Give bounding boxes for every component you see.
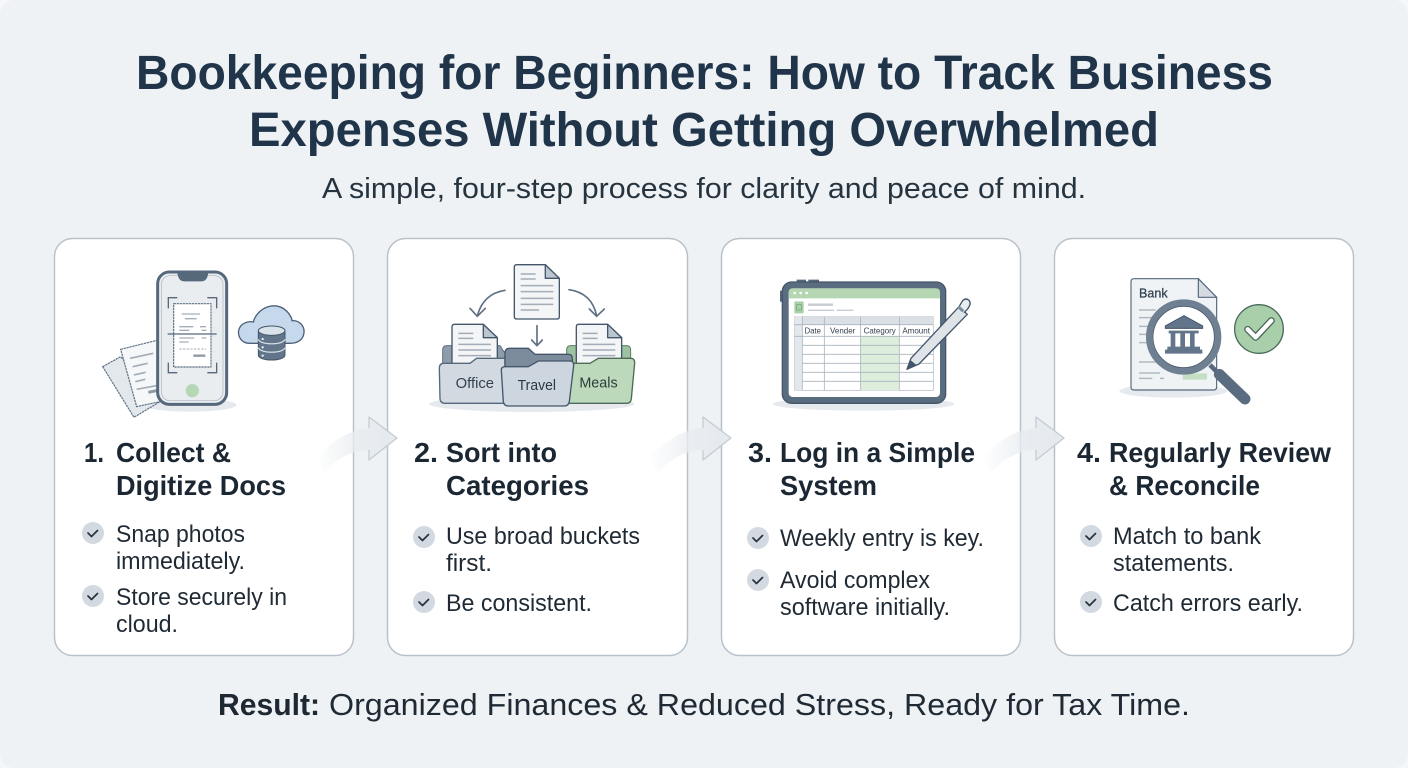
heading: step 3: Log in a Simple <box>780 437 975 468</box>
bullet: snap photos <box>82 521 245 575</box>
title <box>136 47 1273 157</box>
panel: step 4 review and reconcile <box>1054 238 1354 656</box>
icon: phone scanning receipt with cloud storage <box>103 272 304 417</box>
title: Bookkeeping for Beginners: How to Track Business <box>136 47 1273 100</box>
panel: step 2 sort into categories <box>388 238 688 656</box>
subtitle: A simple, four-step process for clarity and peace of mind. <box>322 173 1086 205</box>
heading: step 4: & Reconcile <box>1109 470 1260 501</box>
bullet: broad buckets: first. <box>446 550 492 577</box>
panel: step 1 collect and digitize <box>54 238 354 656</box>
heading: step 3 <box>748 437 975 501</box>
heading: step 2: 2. <box>414 437 438 468</box>
icon: tablet spreadsheet with stylus: Date <box>805 326 821 336</box>
arrow: step 3 to step 4 <box>982 417 1064 473</box>
heading: step 3: System <box>780 470 877 501</box>
heading: step 1: Digitize Docs <box>116 470 286 501</box>
arrow: step 1 to step 2 <box>316 417 397 473</box>
heading: step 4 <box>1077 437 1332 501</box>
bullet: store securely: cloud. <box>116 611 178 638</box>
bullet: avoid complex software: Avoid complex <box>780 567 930 594</box>
result statement: Result: <box>218 687 320 722</box>
icon: document sorted into folders: Office <box>456 376 494 392</box>
heading: step 2 <box>414 437 589 501</box>
bullet: catch errors early: Catch errors early. <box>1113 590 1303 617</box>
icon: tablet spreadsheet with stylus: Amount <box>902 326 931 336</box>
bullet: broad buckets <box>413 523 640 577</box>
icon: document sorted into folders <box>429 265 635 412</box>
result statement: Organized Finances & Reduced Stress, Ready for Tax Time. <box>329 687 1190 722</box>
title: Expenses Without Getting Overwhelmed <box>249 104 1159 157</box>
bullet: weekly entry: Weekly entry is key. <box>780 525 984 552</box>
heading: step 2: Sort into <box>446 437 557 468</box>
panel: step 3 log in a simple system <box>722 238 1020 656</box>
icon: tablet spreadsheet with stylus: Category <box>864 326 896 336</box>
icon: document sorted into folders: Meals <box>579 375 618 391</box>
arrow: step 2 to step 3 <box>649 417 731 473</box>
icon: tablet spreadsheet with stylus: Vender <box>830 326 855 336</box>
icon: bank statement under magnifier with check badge: Bank <box>1139 286 1168 300</box>
bullet: store securely <box>82 584 287 638</box>
bullet: avoid complex software <box>747 567 950 621</box>
bullet: match to bank statements: Match to bank <box>1113 523 1262 550</box>
heading: step 1 <box>84 437 286 501</box>
bullet: be consistent: Be consistent. <box>446 590 592 617</box>
icon: bank statement under magnifier with check badge <box>1119 279 1283 399</box>
heading: step 2: Categories <box>446 470 589 501</box>
bullet: avoid complex software: software initially. <box>780 594 950 621</box>
heading: step 4: Regularly Review <box>1109 437 1332 468</box>
heading: step 4: 4. <box>1077 437 1101 468</box>
heading: step 3: 3. <box>748 437 772 468</box>
bullet: match to bank statements: statements. <box>1113 550 1234 577</box>
bullet: snap photos: immediately. <box>116 548 245 575</box>
bullet: store securely: Store securely in <box>116 584 287 611</box>
icon: tablet spreadsheet with stylus <box>773 281 970 411</box>
bullet: snap photos: Snap photos <box>116 521 245 548</box>
heading: step 1: 1. <box>84 437 104 468</box>
icon: document sorted into folders: Travel <box>518 378 556 394</box>
bullet: broad buckets: Use broad buckets <box>446 523 640 550</box>
heading: step 1: Collect & <box>116 437 231 468</box>
bullet: match to bank statements <box>1080 523 1262 577</box>
